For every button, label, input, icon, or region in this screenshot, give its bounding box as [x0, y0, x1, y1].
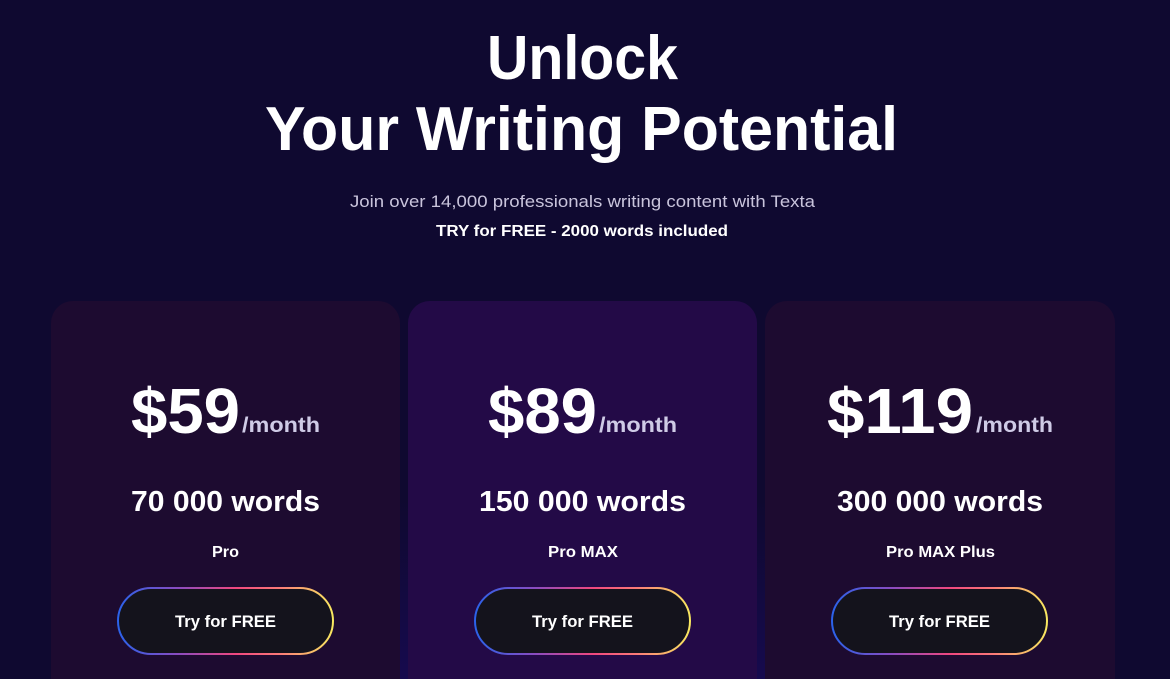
free trial note: TRY for FREE - 2000 words included: [436, 223, 728, 240]
per month: /month: [599, 414, 677, 437]
button: [118, 588, 333, 654]
word count: 300 000 words: [837, 486, 1043, 518]
plan name: Pro MAX Plus: [886, 544, 995, 561]
button: [832, 588, 1047, 654]
price: $59: [131, 375, 240, 447]
button: [475, 588, 690, 654]
title: Your Writing Potential: [265, 95, 898, 164]
word count: 150 000 words: [479, 486, 686, 518]
word count: 70 000 words: [131, 486, 320, 518]
per month: /month: [242, 414, 320, 437]
panel: Pro MAX plan: [408, 301, 757, 679]
button: Try for FREE: [889, 613, 990, 631]
per month: /month: [976, 414, 1053, 437]
subtitle: Join over 14,000 professionals writing content with Texta: [350, 193, 816, 211]
price: $89: [488, 375, 597, 447]
price: $119: [827, 375, 973, 447]
title: [265, 24, 898, 164]
plan name: Pro: [212, 544, 239, 561]
panel: Pro MAX Plus plan: [765, 301, 1115, 679]
button: Try for FREE: [532, 613, 633, 631]
panel: Pro plan: [51, 301, 400, 679]
button: Try for FREE: [175, 613, 276, 631]
plan name: Pro MAX: [548, 544, 619, 561]
title: Unlock: [487, 24, 678, 93]
